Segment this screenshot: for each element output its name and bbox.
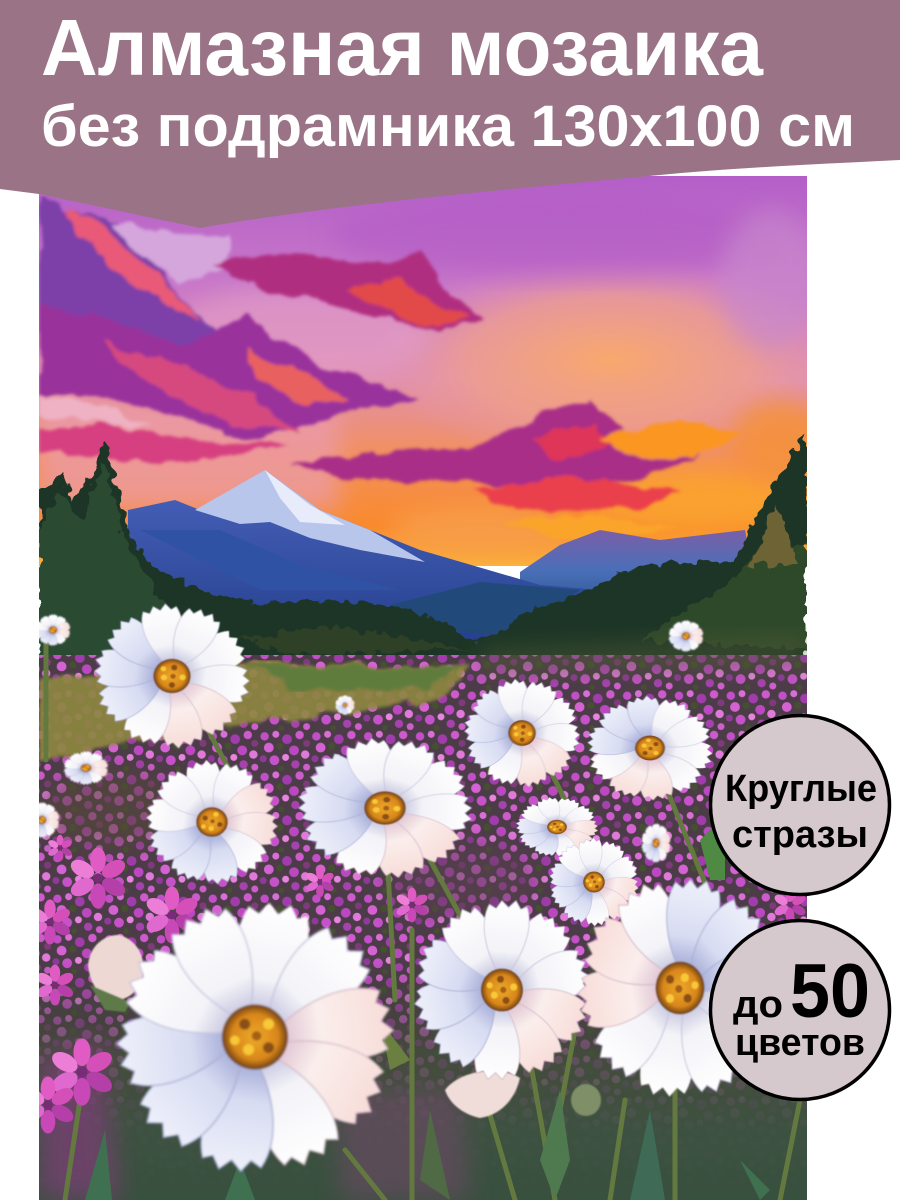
badge: up to 50 colours: цветов [735, 1022, 865, 1064]
forest treeline [39, 434, 807, 655]
pink flowers [20, 835, 807, 1134]
daisy 8: large foreground [115, 902, 396, 1174]
snow cap [195, 470, 425, 562]
daisy 10 [576, 878, 762, 1098]
stems and leaves [46, 645, 800, 1200]
daisy 3 [298, 738, 472, 878]
daisy 9 [414, 900, 589, 1080]
painting: mountain meadow at sunset [20, 176, 850, 1200]
daisy 4 [464, 678, 580, 788]
badge: round rhinestones [710, 716, 890, 894]
daisy 7 [550, 838, 638, 926]
daisy 1 [94, 603, 250, 749]
daisy 6 [516, 797, 598, 856]
sky [39, 176, 850, 566]
mountains [128, 470, 760, 650]
clouds [39, 196, 740, 540]
title: Алмазная мозаика [41, 3, 763, 92]
header banner [0, 0, 900, 228]
badge: round rhinestones: стразы [732, 814, 868, 856]
badge: up to 50 colours [710, 920, 890, 1100]
small white flowers and buds [23, 614, 705, 1118]
meadow [39, 635, 807, 1200]
subtitle: без подрамника 130x100 см [41, 94, 855, 159]
daisy 2 [146, 760, 278, 885]
badge: round rhinestones: Круглые [725, 768, 877, 810]
badge: up to 50 colours: 50 [790, 949, 870, 1034]
badge: up to 50 colours: до [733, 984, 783, 1026]
daisy 5 [586, 696, 713, 800]
